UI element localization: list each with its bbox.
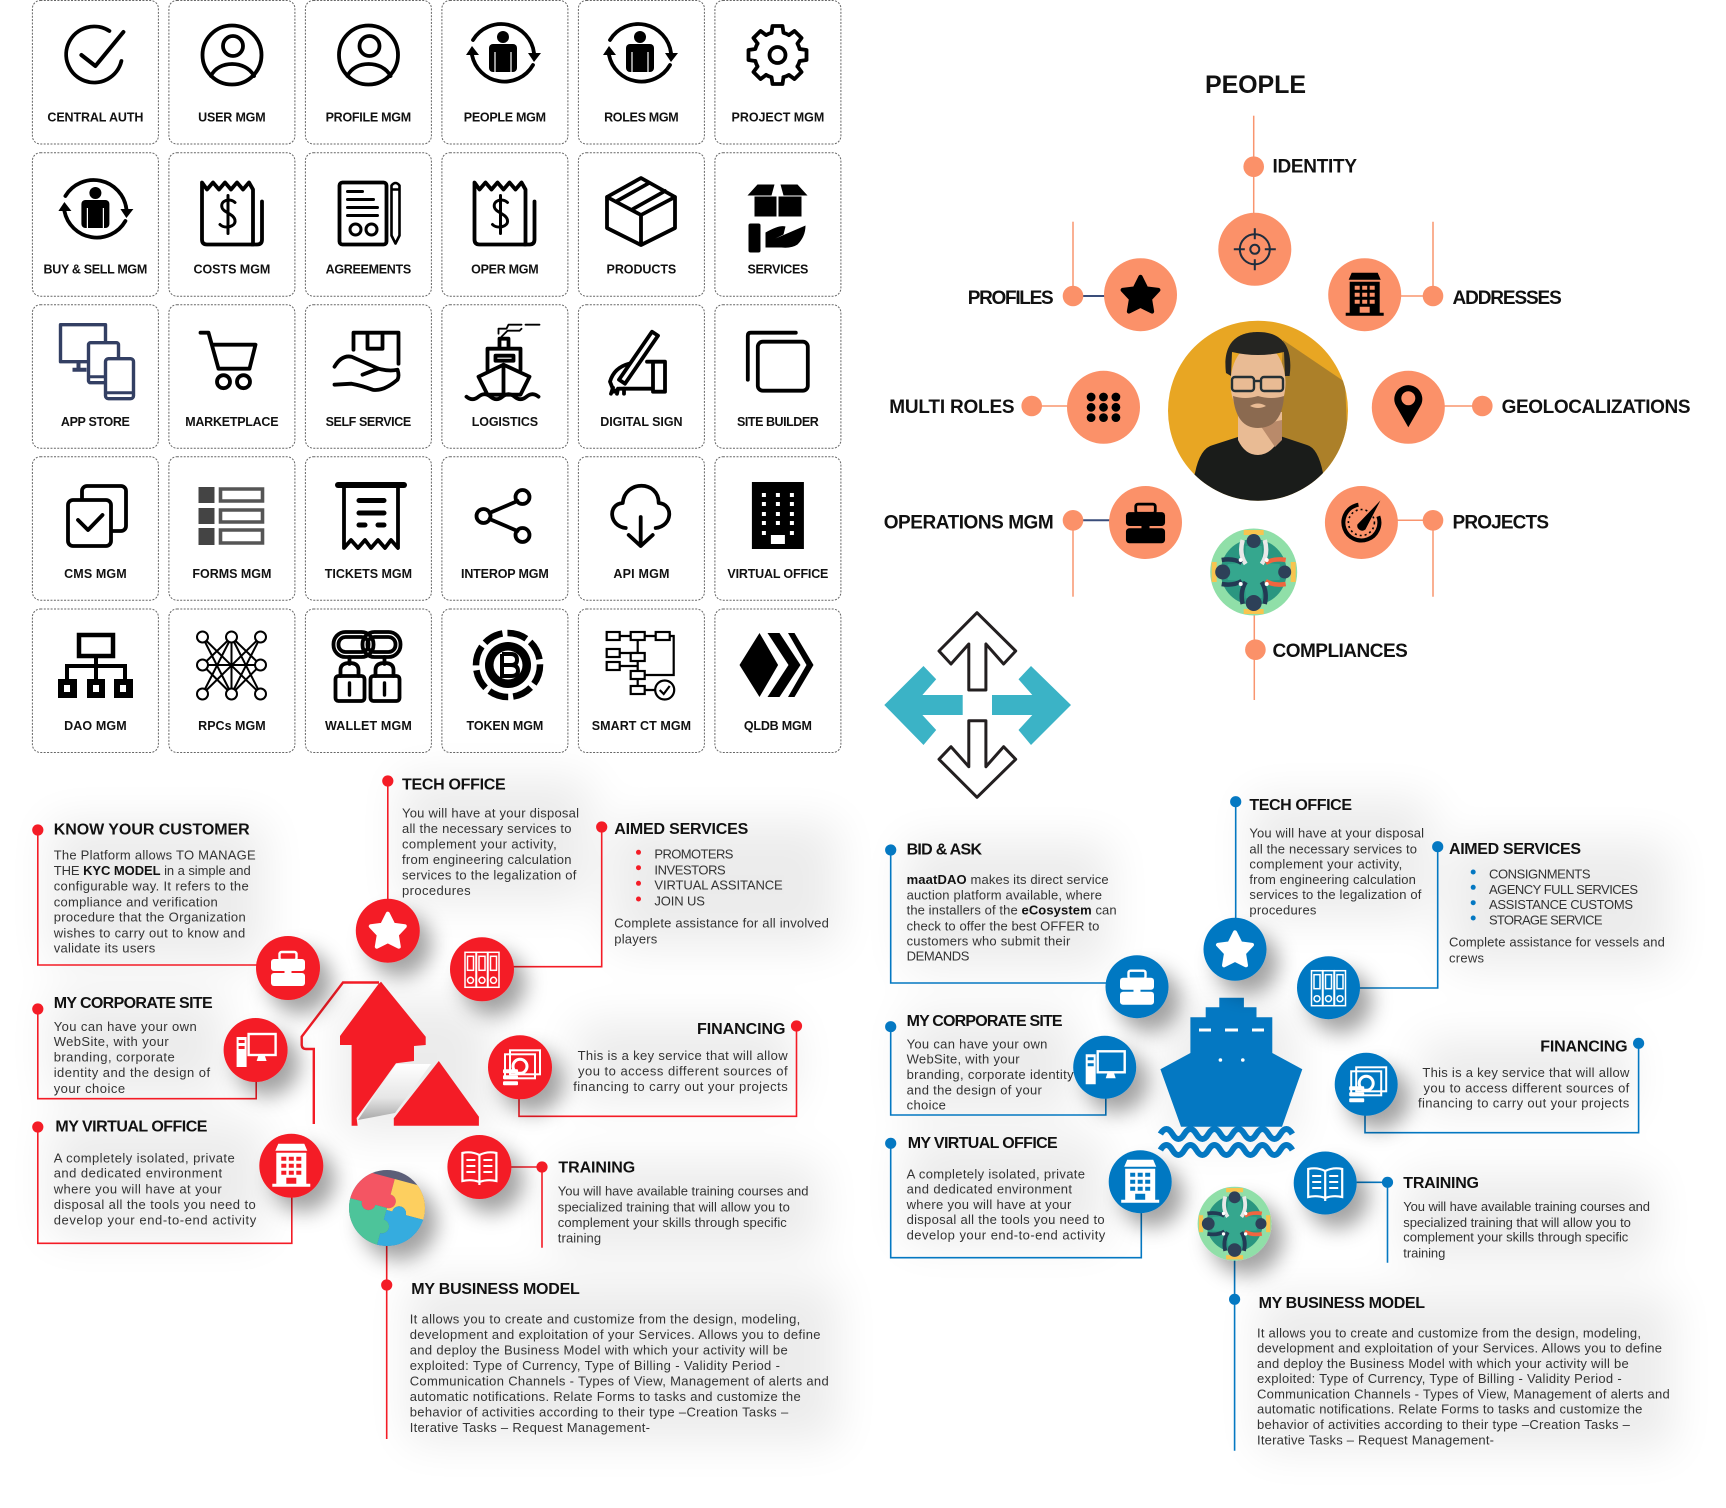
card: qldb mgm: QLDB MGM xyxy=(744,719,812,733)
text: my corporate site: You can have your own xyxy=(907,1037,1047,1052)
icon: book badge xyxy=(447,1135,511,1199)
text: my corporate site: and the design of your xyxy=(907,1082,1043,1097)
card: site builder xyxy=(715,305,841,448)
text: my corporate site: MY CORPORATE SITE xyxy=(54,995,213,1012)
text: financing: you to access different sources of xyxy=(578,1064,788,1079)
card: rpcs mgm xyxy=(169,609,295,752)
card: marketplace: MARKETPLACE xyxy=(185,415,279,429)
text: my business model: exploited: Type of Currency, Type of Billing - Validity Period - xyxy=(1257,1371,1622,1386)
text: my corporate site xyxy=(907,1013,1074,1113)
text: financing: This is a key service that will allow xyxy=(1422,1065,1630,1080)
text: my business model: automatic notifications. Relate Forms to tasks and customize the xyxy=(1257,1401,1642,1416)
label: addresses: ADDRESSES xyxy=(1452,288,1562,309)
text: training: specialized training that will allow you to xyxy=(1403,1215,1631,1230)
text: aimed services: PROMOTERS xyxy=(654,847,734,862)
text: my corporate site: your choice xyxy=(54,1081,125,1096)
icon: building badge xyxy=(1109,1150,1172,1213)
text: tech office: complement your activity, xyxy=(402,836,557,852)
text: my corporate site xyxy=(54,995,213,1096)
text shadows xyxy=(905,798,1673,1450)
card: wallet mgm: WALLET MGM xyxy=(325,719,412,733)
card: self service xyxy=(305,305,431,448)
text: bid and ask: DEMANDS xyxy=(907,949,970,964)
card: costs mgm: COSTS MGM xyxy=(194,262,270,276)
text: my virtual office: A completely isolated, private xyxy=(907,1166,1085,1181)
card: products xyxy=(578,153,704,296)
text: my business model: and deploy the Business Model with which your activity will be xyxy=(1257,1356,1629,1371)
card: buy and sell mgm xyxy=(32,153,158,296)
card: people mgm: PEOPLE MGM xyxy=(464,110,546,124)
card: services xyxy=(715,153,841,296)
text shadows xyxy=(50,778,838,1442)
text: tech office: TECH OFFICE xyxy=(402,776,506,794)
icon: star circle xyxy=(1104,258,1177,331)
card: marketplace xyxy=(169,305,295,448)
text: aimed services: VIRTUAL ASSITANCE xyxy=(654,878,783,893)
text: my business model: exploited: Type of Currency, Type of Billing - Validity Period - xyxy=(410,1358,780,1373)
text: my business model: behavior of activities according to their type –Creation Tasks – xyxy=(1257,1417,1631,1432)
text: my business model: behavior of activities according to their type –Creation Tasks – xyxy=(410,1405,789,1420)
card: smart ct mgm: SMART CT MGM xyxy=(592,719,691,733)
text: financing: FINANCING xyxy=(697,1021,786,1038)
card: virtual office xyxy=(715,457,841,600)
illustration: team table badge xyxy=(1198,1187,1272,1261)
card: tickets mgm: TICKETS MGM xyxy=(325,567,412,581)
label: profiles: PROFILES xyxy=(968,288,1054,309)
text: aimed services: Complete assistance for vessels and xyxy=(1449,935,1665,950)
icon: money badge xyxy=(488,1035,552,1099)
card: self service: SELF SERVICE xyxy=(326,415,411,429)
text: training xyxy=(558,1160,808,1246)
text: financing: This is a key service that will allow xyxy=(578,1048,788,1063)
text: tech office: services to the legalization of xyxy=(1249,887,1422,902)
text: my corporate site: choice xyxy=(907,1098,946,1113)
text: know your customer: procedure that the Organization xyxy=(54,910,246,925)
icon: briefcase circle xyxy=(1109,486,1182,559)
text: training: You will have available training courses and xyxy=(1403,1199,1650,1214)
text: bid and ask: auction platform available, where xyxy=(907,888,1102,903)
connector: identity xyxy=(1243,116,1264,213)
card: oper mgm: OPER MGM xyxy=(471,262,539,276)
text: training: complement your skills through specific xyxy=(1403,1230,1629,1245)
label: operations mgm: OPERATIONS MGM xyxy=(884,512,1054,534)
card: profile mgm: PROFILE MGM xyxy=(326,110,411,124)
text: bid and ask xyxy=(907,842,1117,964)
illustration: person avatar xyxy=(1168,321,1350,510)
text: financing: financing to carry out your projects xyxy=(1418,1096,1630,1111)
connector: multi roles xyxy=(1021,396,1075,416)
card: forms mgm xyxy=(169,457,295,600)
text: my corporate site: WebSite, with your xyxy=(54,1034,169,1049)
card: oper mgm xyxy=(442,153,568,296)
card: project mgm xyxy=(715,0,841,144)
card: dao mgm: DAO MGM xyxy=(64,719,127,733)
icon: puzzle xyxy=(338,1169,433,1257)
text: my business model: Iterative Tasks – Request Management- xyxy=(410,1420,650,1435)
card: site builder: SITE BUILDER xyxy=(737,415,819,429)
card: cms mgm: CMS MGM xyxy=(64,567,127,581)
card: token mgm xyxy=(442,609,568,752)
text: tech office: all the necessary services to xyxy=(402,821,572,836)
text: tech office xyxy=(1249,797,1424,918)
card: logistics xyxy=(442,305,568,448)
text: my corporate site: branding, corporate xyxy=(54,1050,175,1065)
text: financing xyxy=(1418,1038,1630,1111)
text: my corporate site: branding, corporate identity xyxy=(907,1067,1074,1082)
text: tech office: all the necessary services to xyxy=(1249,841,1417,856)
card: cms mgm xyxy=(32,457,158,600)
text: my virtual office: where you will have at your xyxy=(906,1197,1072,1212)
card: project mgm: PROJECT MGM xyxy=(732,110,824,124)
text: tech office: from engineering calculation xyxy=(1249,872,1416,887)
text: my virtual office: MY VIRTUAL OFFICE xyxy=(908,1135,1058,1152)
icon: money badge xyxy=(1335,1053,1398,1116)
card: rpcs mgm: RPCs MGM xyxy=(198,719,266,733)
text: training: TRAINING xyxy=(1403,1175,1479,1192)
text: tech office: You will have at your disposal xyxy=(402,806,579,820)
text: tech office: procedures xyxy=(1249,903,1317,918)
text: aimed services: players xyxy=(614,931,658,946)
card: user mgm: USER MGM xyxy=(198,110,266,124)
text: tech office: TECH OFFICE xyxy=(1249,797,1352,814)
card: api mgm xyxy=(578,457,704,600)
label: geolocalizations: GEOLOCALIZATIONS xyxy=(1502,397,1690,418)
text: my virtual office: disposal all the tools you need to xyxy=(907,1212,1105,1227)
text: know your customer: THE KYC MODEL in a simple and xyxy=(54,863,251,878)
text: financing xyxy=(573,1021,788,1094)
connector lines xyxy=(32,775,802,1439)
card: costs mgm xyxy=(169,153,295,296)
text: training: complement your skills through specific xyxy=(558,1215,787,1230)
connector: projects xyxy=(1392,510,1443,597)
text: my virtual office: develop your end-to-end activity xyxy=(54,1213,257,1228)
icon: building badge xyxy=(259,1134,323,1198)
text: my virtual office xyxy=(906,1135,1106,1243)
card: token mgm: TOKEN MGM xyxy=(466,719,543,733)
title: people: PEOPLE xyxy=(1205,71,1306,99)
card: people mgm xyxy=(442,0,568,144)
text: training xyxy=(1403,1175,1650,1261)
text: tech office xyxy=(402,776,579,898)
text: know your customer xyxy=(53,822,256,956)
icon: briefcase badge xyxy=(256,936,320,1000)
card: agreements: AGREEMENTS xyxy=(326,262,411,276)
icon: target circle xyxy=(1218,213,1291,286)
text: my virtual office: and dedicated environment xyxy=(907,1181,1072,1196)
text: my virtual office: disposal all the tools you need to xyxy=(54,1197,256,1212)
text: my corporate site: WebSite, with your xyxy=(907,1051,1020,1066)
text: my business model: Iterative Tasks – Request Management- xyxy=(1257,1432,1494,1447)
text: training: training xyxy=(1403,1246,1445,1261)
text: training: You will have available training courses and xyxy=(558,1184,808,1199)
icon: computer badge xyxy=(224,1018,288,1082)
card: roles mgm: ROLES MGM xyxy=(604,110,679,124)
text: aimed services: STORAGE SERVICE xyxy=(1489,913,1603,928)
text: my business model: Communication Channels - Types of View, Management of alerts and xyxy=(1257,1387,1670,1402)
text: financing: financing to carry out your projects xyxy=(573,1079,788,1094)
card: agreements xyxy=(305,153,431,296)
text: my virtual office xyxy=(53,1118,257,1228)
text: my business model xyxy=(410,1281,829,1435)
text: my virtual office: MY VIRTUAL OFFICE xyxy=(55,1118,208,1136)
icon: gauge circle xyxy=(1325,486,1398,559)
card: digital sign: DIGITAL SIGN xyxy=(600,415,683,429)
text: financing: FINANCING xyxy=(1540,1038,1628,1056)
icon: binders badge xyxy=(450,937,514,1001)
card: products: PRODUCTS xyxy=(607,262,676,276)
card: forms mgm: FORMS MGM xyxy=(192,567,271,581)
connector lines xyxy=(885,796,1644,1451)
text: know your customer: wishes to carry out to know and xyxy=(53,925,245,940)
text: aimed services: Complete assistance for all involved xyxy=(614,916,829,931)
label: compliances: COMPLIANCES xyxy=(1272,641,1408,662)
label: multi roles: MULTI ROLES xyxy=(889,397,1015,418)
connector: addresses xyxy=(1395,222,1443,306)
text: bid and ask: BID & ASK xyxy=(907,842,982,858)
text: know your customer: configurable way. It refers to the xyxy=(54,879,249,894)
card: qldb mgm xyxy=(715,609,841,752)
text: bid and ask: customers who submit their xyxy=(907,933,1071,948)
card: api mgm: API MGM xyxy=(613,567,669,581)
card: interop mgm xyxy=(442,457,568,600)
text: bid and ask: the installers of the eCosystem can xyxy=(907,903,1117,918)
text: my corporate site: identity and the design of xyxy=(54,1065,210,1080)
text: my business model xyxy=(1257,1295,1670,1447)
card: buy and sell mgm: BUY & SELL MGM xyxy=(44,262,147,276)
icon: computer badge xyxy=(1073,1036,1136,1099)
text: my virtual office: A completely isolated, private xyxy=(54,1151,235,1166)
card: app store: APP STORE xyxy=(61,415,130,429)
text: my business model: and deploy the Business Model with which your activity will be xyxy=(410,1343,788,1358)
panel: people diagram xyxy=(884,71,1690,700)
icon: pin circle xyxy=(1372,371,1445,444)
text: training: specialized training that will allow you to xyxy=(558,1200,790,1215)
text: aimed services: CONSIGNMENTS xyxy=(1489,866,1591,881)
text: bid and ask: maatDAO makes its direct service xyxy=(907,872,1109,887)
text: my corporate site: MY CORPORATE SITE xyxy=(907,1013,1063,1030)
text: my virtual office: develop your end-to-end activity xyxy=(907,1228,1106,1243)
text: aimed services: AIMED SERVICES xyxy=(1449,841,1581,858)
text: my business model: Communication Channels - Types of View, Management of alerts and xyxy=(410,1374,829,1389)
illustration: team table xyxy=(1210,528,1297,616)
icon: building circle xyxy=(1328,258,1401,331)
text: bid and ask: check to offer the best OFFER to xyxy=(907,918,1099,933)
text: aimed services: AIMED SERVICES xyxy=(614,821,749,838)
text: aimed services: ASSISTANCE CUSTOMS xyxy=(1489,897,1633,912)
card: logistics: LOGISTICS xyxy=(472,415,538,429)
text: my virtual office: where you will have at your xyxy=(53,1182,222,1197)
card: user mgm xyxy=(169,0,295,144)
card: interop mgm: INTEROP MGM xyxy=(461,567,549,581)
icon: star badge xyxy=(1204,918,1266,981)
icon: star badge xyxy=(356,899,420,963)
icon: book badge xyxy=(1294,1152,1357,1214)
icon: briefcase badge xyxy=(1106,955,1168,1018)
logo: red arrow mark xyxy=(302,982,479,1126)
text: training: TRAINING xyxy=(558,1160,635,1176)
text: my business model: MY BUSINESS MODEL xyxy=(411,1281,580,1298)
card: smart ct mgm xyxy=(578,609,704,752)
panel: blue services diagram xyxy=(885,796,1673,1451)
text: my corporate site: You can have your own xyxy=(54,1019,197,1034)
text: aimed services xyxy=(1449,841,1665,965)
illustration: blue ship xyxy=(1160,998,1302,1155)
card: digital sign xyxy=(578,305,704,448)
text: my business model: development and exploitation of your Services. Allows you to define xyxy=(410,1327,820,1342)
text: my virtual office: and dedicated environment xyxy=(54,1166,222,1181)
text: aimed services: AGENCY FULL SERVICES xyxy=(1489,882,1638,897)
text: my business model: development and exploitation of your Services. Allows you to define xyxy=(1257,1340,1662,1355)
text: my business model: It allows you to create and customize from the design, modeling, xyxy=(410,1312,800,1327)
text: aimed services: INVESTORS xyxy=(654,862,726,877)
connector: profiles xyxy=(1063,222,1110,306)
label: projects: PROJECTS xyxy=(1452,512,1549,534)
text: know your customer: The Platform allows TO MANAGE xyxy=(54,847,256,862)
text: aimed services: crews xyxy=(1449,950,1484,965)
panel: services grid xyxy=(32,0,841,752)
card: wallet mgm xyxy=(305,609,431,752)
card: services: SERVICES xyxy=(747,262,808,276)
text: training: training xyxy=(558,1231,601,1246)
card: roles mgm xyxy=(578,0,704,144)
text: know your customer: validate its users xyxy=(54,941,156,956)
text: tech office: complement your activity, xyxy=(1249,856,1402,871)
text: tech office: services to the legalization of xyxy=(402,868,577,882)
text: tech office: You will have at your disposal xyxy=(1249,826,1424,841)
text: aimed services xyxy=(614,821,829,946)
icon: four-way arrows xyxy=(884,613,1071,797)
card: virtual office: VIRTUAL OFFICE xyxy=(727,567,828,581)
text: know your customer: KNOW YOUR CUSTOMER xyxy=(54,822,250,838)
icon: binders badge xyxy=(1297,956,1360,1019)
text: aimed services: JOIN US xyxy=(654,893,705,908)
card: profile mgm xyxy=(305,0,431,144)
text: financing: you to access different sources of xyxy=(1424,1081,1630,1096)
card: app store xyxy=(32,305,158,448)
text: my business model: It allows you to create and customize from the design, modeling, xyxy=(1257,1325,1641,1340)
text: know your customer: compliance and verification xyxy=(54,894,218,909)
card: central auth xyxy=(32,0,158,144)
card: tickets mgm xyxy=(305,457,431,600)
connector: operations mgm xyxy=(1063,510,1112,597)
label: identity: IDENTITY xyxy=(1272,157,1357,178)
card: central auth: CENTRAL AUTH xyxy=(47,110,143,124)
icon: dots circle xyxy=(1067,371,1140,444)
text: tech office: procedures xyxy=(402,883,471,898)
text: my business model: automatic notifications. Relate Forms to tasks and customize the xyxy=(410,1389,801,1404)
text: tech office: from engineering calculation xyxy=(402,852,572,867)
card: dao mgm xyxy=(32,609,158,752)
connector: geolocalizations xyxy=(1435,396,1493,416)
text: my business model: MY BUSINESS MODEL xyxy=(1259,1295,1425,1312)
connector: compliances xyxy=(1245,610,1266,700)
panel: red services diagram xyxy=(32,775,838,1442)
